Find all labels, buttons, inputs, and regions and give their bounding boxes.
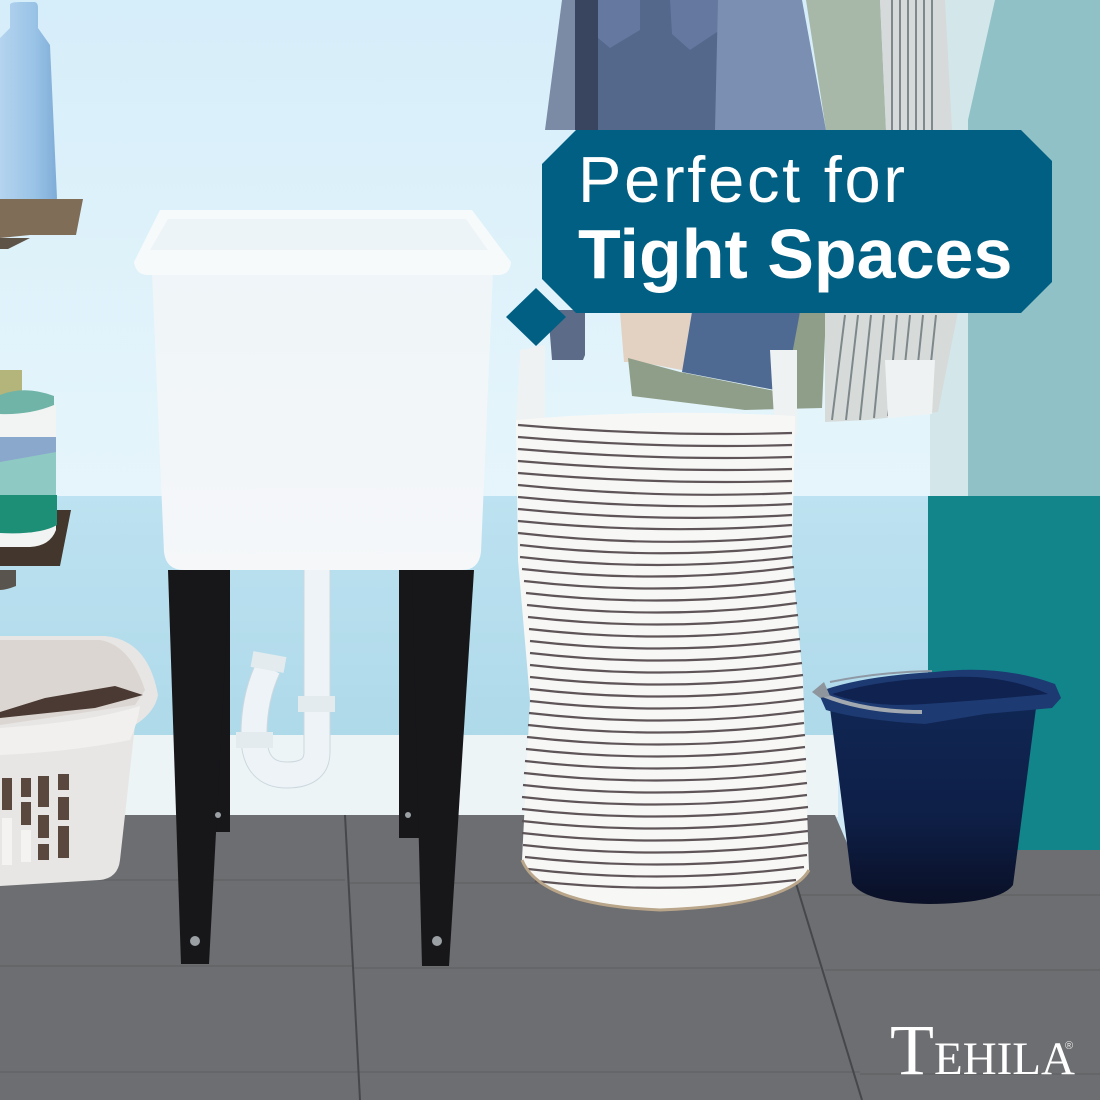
pipe drain [236,570,335,775]
left shelf with wipes container [0,370,71,590]
sink legs [168,570,474,966]
hanging clothes [545,0,958,422]
laundry basket [0,636,158,886]
leg bolts [190,812,442,946]
wall background [0,0,1100,817]
navy bucket [812,670,1061,904]
striped hamper [516,345,809,910]
brand logo: TEHILA [890,1010,1075,1090]
brand logo: ® [1065,1040,1073,1052]
callout pointer diamond [506,288,566,346]
floor tiles [0,815,1100,1100]
callout box [542,130,1052,313]
sink tub [134,210,511,570]
callout heading line 1: Perfect for [578,143,905,216]
teal curtain panel [928,0,1100,852]
left shelf with bottle [0,2,83,249]
callout heading line 2: Tight Spaces [578,215,1012,293]
